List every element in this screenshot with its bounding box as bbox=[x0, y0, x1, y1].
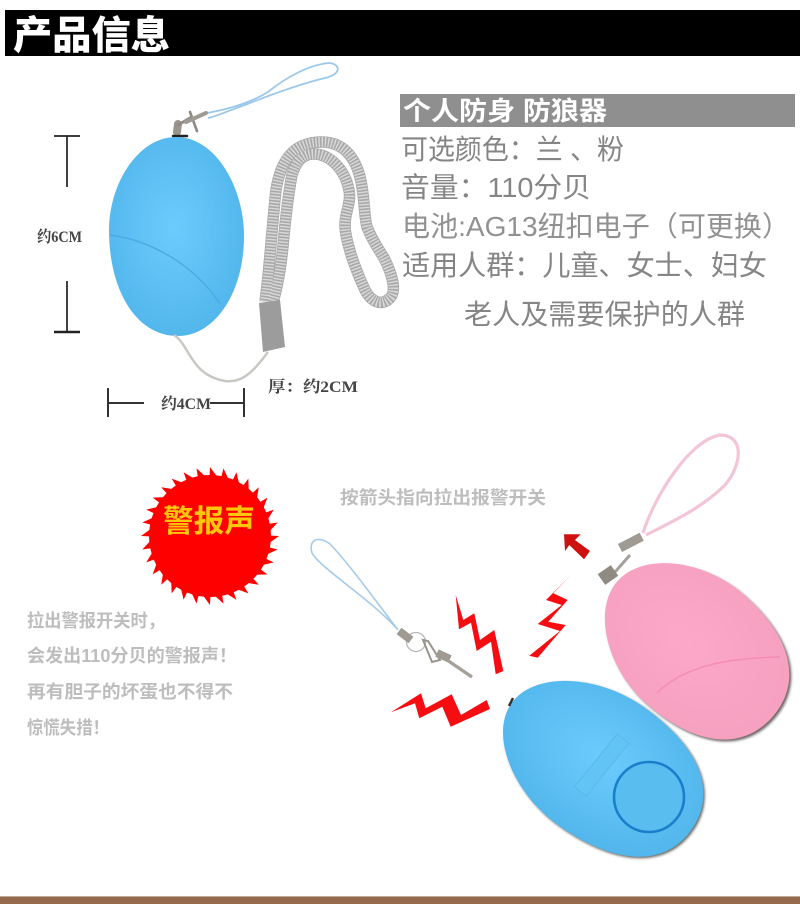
title banner bbox=[5, 10, 800, 58]
audience: 适用人群：儿童、女士、妇女 bbox=[402, 250, 767, 281]
lightning bolt lower bbox=[391, 693, 490, 727]
panel: product specs bbox=[400, 94, 795, 330]
dimension: width: 约4CM bbox=[161, 395, 211, 413]
colours: 可选颜色：兰 、粉 bbox=[401, 134, 624, 165]
alarm description text: 拉出警报开关时， bbox=[27, 610, 165, 631]
dimension: thickness: 厚：约2CM bbox=[268, 378, 358, 396]
switch instruction caption: 按箭头指向拉出报警开关 bbox=[340, 487, 546, 508]
egg seam bbox=[110, 235, 220, 304]
volume: 音量：110分贝 bbox=[401, 172, 591, 203]
product photo: blue alarm with lanyard bbox=[109, 63, 393, 381]
strap sleeve bbox=[259, 300, 285, 352]
alarm description text bbox=[27, 610, 237, 738]
spec heading bbox=[400, 94, 795, 127]
arrow: pull direction bbox=[564, 534, 590, 559]
starburst badge: alarm sound bbox=[141, 467, 279, 605]
lightning bolt right bbox=[529, 575, 571, 658]
alarm egg body bbox=[109, 137, 244, 336]
dimension: width bbox=[108, 388, 244, 417]
title banner: 产品信息 bbox=[13, 15, 170, 58]
spec heading: 个人防身 防狼器 bbox=[403, 96, 607, 126]
bottom photo strip bbox=[0, 896, 800, 904]
lightning bolt middle bbox=[456, 595, 503, 674]
pink alarm bbox=[569, 435, 800, 774]
woven strap bbox=[265, 142, 393, 302]
thin strap bbox=[174, 335, 268, 381]
alarm description text: 再有胆子的坏蛋也不得不 bbox=[27, 682, 233, 702]
starburst badge: alarm sound: 警报声 bbox=[163, 504, 255, 539]
metal clip bbox=[173, 112, 206, 136]
audience continued: 老人及需要保护的人群 bbox=[464, 299, 745, 330]
pulled pin with cord bbox=[311, 539, 472, 677]
dimension: height: 约6CM bbox=[37, 228, 82, 246]
battery: 电池:AG13纽扣电子（可更换） bbox=[402, 211, 790, 242]
alarm description text: 惊慌失措！ bbox=[27, 718, 109, 738]
dimension: height bbox=[37, 136, 82, 332]
alarm description text: 会发出110分贝的警报声！ bbox=[27, 645, 237, 666]
cord loop bbox=[207, 63, 338, 118]
blue alarm bbox=[470, 644, 735, 891]
